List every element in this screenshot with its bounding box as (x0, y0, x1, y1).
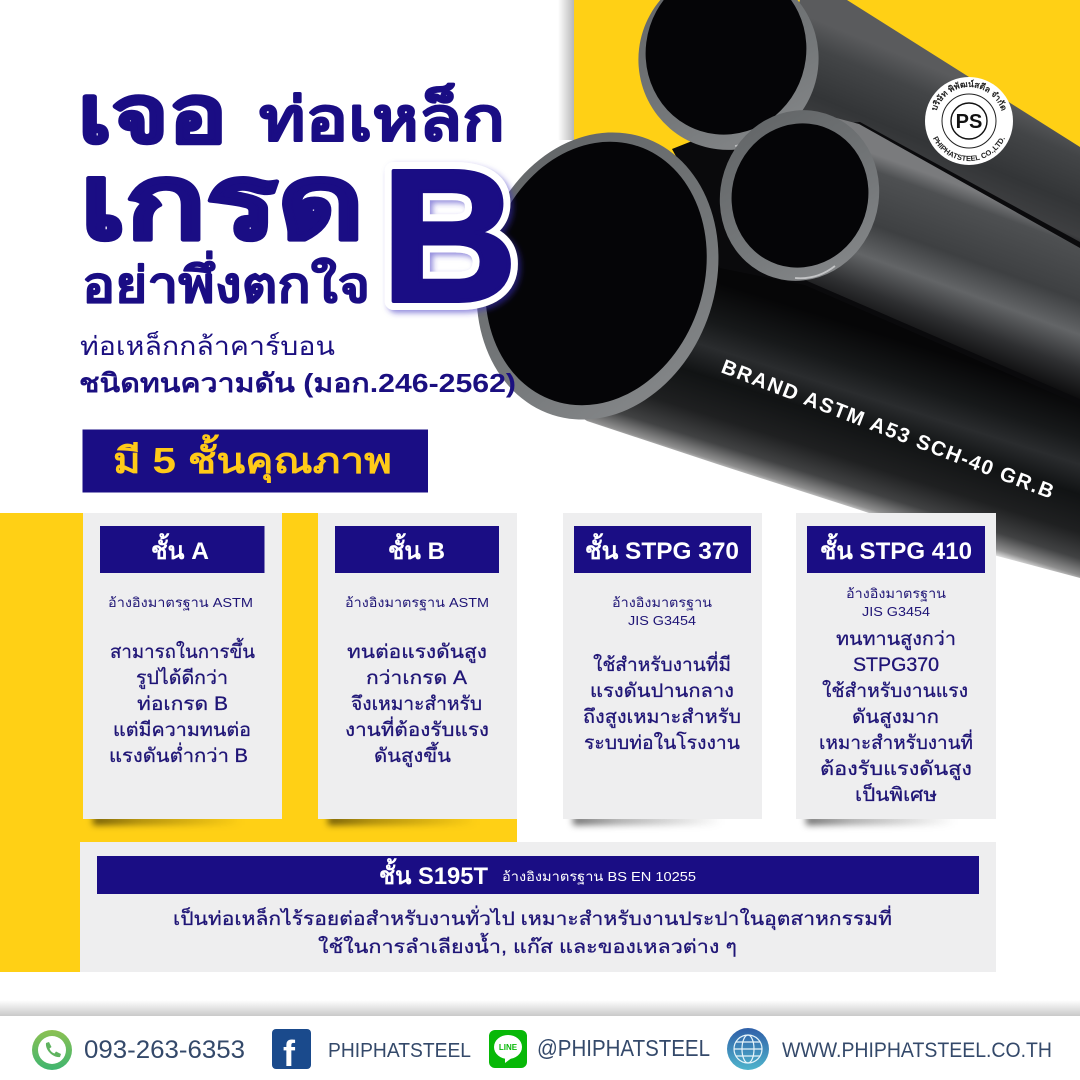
panel: grade STPG 410: อ้างอิงมาตรฐาน (846, 586, 946, 602)
icon: facebook: f (283, 1033, 296, 1074)
top pipe (615, 0, 1080, 242)
facebook name: PHIPHATSTEEL (328, 1040, 471, 1062)
gap shadow between pipes (672, 110, 1080, 420)
panel: grade A: แต่มีความทนต่อ (113, 719, 251, 741)
panel: grade A (83, 513, 282, 825)
panel: grade STPG 370: ชั้น STPG 370 (585, 532, 739, 565)
big letter B: B (381, 131, 518, 342)
phone number: 093-263-6353 (84, 1036, 245, 1064)
title (78, 70, 518, 342)
panel: grade S195T: ใช้ในการลำเลียงน้ำ, แก๊ส และของเหลวต่าง ๆ (318, 933, 737, 958)
panel: grade B: อ้างอิงมาตรฐาน ASTM (345, 595, 489, 611)
footer contact bar (0, 1000, 1080, 1074)
panel: grade STPG 410: ดันสูงมาก (852, 707, 939, 728)
panel: grade STPG 370 (563, 513, 762, 825)
company seal logo (925, 77, 1013, 165)
panel: grade STPG 370: ระบบท่อในโรงงาน (584, 731, 740, 754)
panel: grade B: ชั้น B (388, 532, 445, 565)
panel: grade A: ท่อเกรด B (137, 694, 228, 715)
icon: phone (32, 1030, 72, 1070)
company seal logo: PHIPHATSTEEL CO.,LTD. (933, 136, 1005, 162)
badge: 5 grades (82, 430, 428, 492)
company seal logo: PS (956, 111, 982, 133)
panel: grade A: แรงดันต่ำกว่า B (109, 742, 248, 767)
subtitle: ชนิดทนความดัน (มอก.246-2562) (79, 368, 516, 398)
big pipe (477, 132, 1080, 578)
subtitle: ท่อเหล็กกล้าคาร์บอน (80, 330, 335, 361)
icon: line (489, 1030, 527, 1068)
panel: grade STPG 410: ชั้น STPG 410 (820, 532, 972, 565)
panel: grade STPG 370: ถึงสูงเหมาะสำหรับ (583, 707, 741, 728)
panel: grade S195T: ชั้น S195T (379, 857, 488, 890)
panel: grade A: รูปได้ดีกว่า (136, 667, 228, 689)
panel: grade STPG 410: เหมาะสำหรับงานที่ (819, 729, 973, 754)
yellow corner block (558, 0, 1080, 170)
panel: grade B: จึงเหมาะสำหรับ (351, 694, 482, 715)
panel: grade A: ชั้น A (151, 532, 209, 565)
panel: grade STPG 410: ทนทานสูงกว่า (836, 629, 956, 650)
panel: grade S195T (80, 842, 996, 972)
pipe marking text: BRAND ASTM A53 SCH-40 GR.B (718, 355, 1057, 504)
panel: grade STPG 410: ต้องรับแรงดันสูง (820, 759, 972, 780)
panel: grade STPG 370: ใช้สำหรับงานที่มี (593, 651, 731, 676)
title: ท่อเหล็ก (259, 83, 505, 153)
middle pipe (720, 110, 1080, 394)
big letter B: B (381, 131, 518, 342)
panel: grade STPG 410 (796, 513, 996, 825)
panel: grade A: อ้างอิงมาตรฐาน ASTM (108, 595, 253, 611)
panel: grade STPG 370: JIS G3454 (628, 613, 696, 628)
yellow backing block (0, 513, 517, 972)
panel: grade STPG 370: แรงดันปานกลาง (590, 681, 734, 702)
title: เกรด (80, 145, 364, 261)
panel: grade S195T: อ้างอิงมาตรฐาน BS EN 10255 (502, 869, 696, 885)
panel: grade STPG 410: JIS G3454 (862, 604, 930, 619)
panel: grade B: กว่าเกรด A (366, 668, 467, 689)
line account: @PHIPHATSTEEL (537, 1035, 710, 1061)
panel: grade STPG 410: ใช้สำหรับงานแรง (822, 680, 968, 702)
website: WWW.PHIPHATSTEEL.CO.TH (782, 1039, 1052, 1062)
badge: 5 grades: มี 5 ชั้นคุณภาพ (113, 434, 392, 484)
icon: facebook (272, 1029, 311, 1074)
panel: grade STPG 370: อ้างอิงมาตรฐาน (612, 595, 712, 611)
subtitle (79, 330, 516, 398)
title: อย่าพึ่งตกใจ (82, 250, 370, 313)
panel: grade S195T: เป็นท่อเหล็กไร้รอยต่อสำหรับงานทั่วไป เหมาะสำหรับงานประปาในอุตสาหกรรมที่ (173, 905, 892, 931)
icon: globe (727, 1028, 769, 1070)
icon: line: LINE (499, 1043, 518, 1052)
panel: grade B (318, 513, 517, 825)
photo: three black steel pipes (440, 0, 1080, 578)
panel: grade A: สามารถในการขึ้น (110, 638, 255, 663)
panel: grade B: ดันสูงขึ้น (374, 742, 451, 767)
panel: grade B: งานที่ต้องรับแรง (345, 716, 489, 741)
panel: grade B: ทนต่อแรงดันสูง (347, 642, 487, 663)
panel: grade STPG 410: STPG370 (853, 655, 939, 676)
company seal logo: บริษัท พิพัฒน์สตีล จำกัด (932, 80, 1006, 111)
title: เจอ (78, 70, 227, 159)
panel: grade STPG 410: เป็นพิเศษ (855, 782, 937, 806)
